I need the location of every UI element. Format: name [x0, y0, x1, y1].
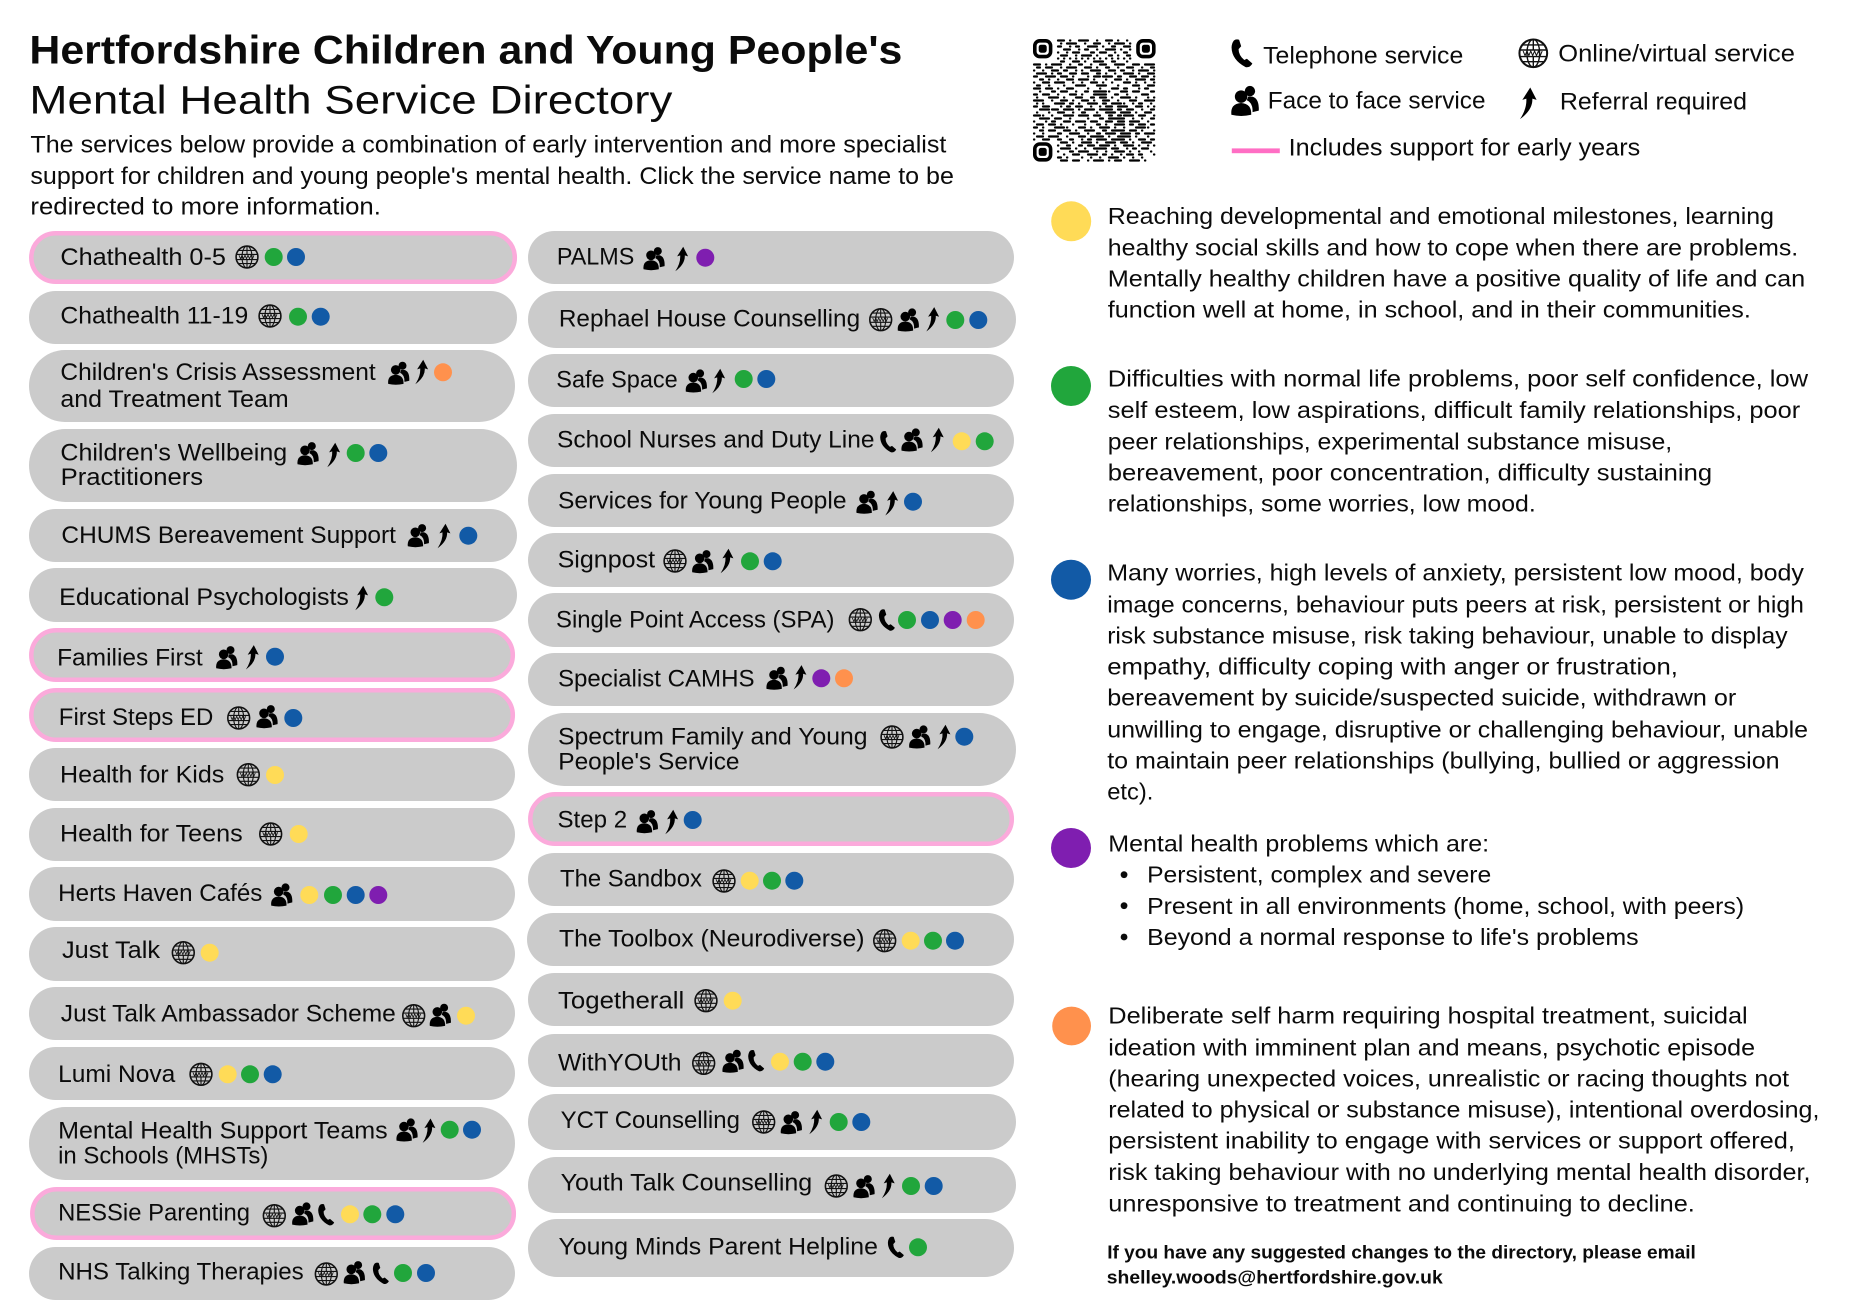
pill: The Toolbox (Neurodiverse) [527, 913, 1014, 966]
key: orange level: Deliberate self harm requiring hospital treatment, suicidal [1108, 1003, 1748, 1029]
key: yellow level [1051, 201, 1805, 322]
icons [888, 1237, 927, 1258]
intro text: redirected to more information. [30, 193, 381, 220]
icons [190, 1063, 282, 1085]
pill: Services for Young People [528, 474, 1014, 527]
key: purple level [1051, 828, 1744, 950]
icons [880, 428, 994, 452]
key: blue level: empathy, difficulty coping with anger or frustration, [1107, 653, 1678, 679]
pill: WithYOUth [528, 1034, 1014, 1087]
pill: YCT Counselling [528, 1094, 1016, 1150]
service name: The Toolbox (Neurodiverse) [559, 926, 864, 953]
key: blue level: Many worries, high levels of anxiety, persistent low mood, body [1107, 560, 1804, 586]
service name: YCT Counselling [561, 1107, 740, 1134]
key: yellow level: Mentally healthy children have a positive quality of life and can [1108, 266, 1805, 292]
service name: People's Service [558, 748, 740, 775]
pill: Signpost [528, 533, 1014, 587]
service name: PALMS [557, 244, 634, 271]
key: green level: Difficulties with normal life problems, poor self confidence, low [1108, 366, 1808, 392]
icons [403, 1004, 475, 1027]
key: orange level: related to physical or substance misuse), intentional overdosing, [1108, 1096, 1819, 1122]
intro text: support for children and young people's mental health. Click the service name to be [30, 163, 954, 190]
key: blue level: image concerns, behaviour puts peers at risk, persistent or high [1107, 591, 1804, 617]
key: green level: self esteem, low aspirations, difficult family relationships, poor [1108, 397, 1800, 423]
key: orange level: risk taking behaviour with no underlying mental health disorder, [1108, 1159, 1810, 1185]
service name: WithYOUth [558, 1049, 682, 1076]
icons [753, 1110, 870, 1134]
service name: Lumi Nova [58, 1061, 176, 1088]
icons [695, 990, 742, 1012]
service name: CHUMS Bereavement Support [61, 522, 396, 549]
service name: Just Talk Ambassador Scheme [61, 1001, 396, 1028]
service name: Services for Young People [558, 488, 846, 515]
icons [263, 1202, 404, 1227]
key: orange level: persistent inability to engage with services or support offered, [1108, 1128, 1795, 1154]
service name: Chathealth 0-5 [60, 244, 226, 271]
key: orange level [1052, 1003, 1819, 1216]
service name: Mental Health Support Teams [58, 1118, 388, 1145]
service name: Herts Haven Cafés [58, 880, 262, 907]
contact note: If you have any suggested changes to the directory, please email [1107, 1241, 1696, 1262]
service name: Rephael House Counselling [559, 306, 860, 333]
icons [874, 930, 964, 952]
pill: CHUMS Bereavement Support [29, 509, 517, 562]
icons [664, 549, 782, 573]
icons [228, 705, 302, 729]
pill: Safe Space [528, 354, 1014, 407]
pill: Step 2 [530, 794, 1012, 844]
service name: Signpost [558, 547, 655, 574]
icons [216, 645, 284, 670]
service name: Children's Wellbeing [60, 439, 287, 466]
legend: face to face service: Face to face service [1268, 88, 1486, 115]
key: purple level: Beyond a normal response to life's problems [1147, 924, 1639, 950]
service name [60, 359, 376, 413]
service name: Chathealth 11-19 [60, 303, 248, 330]
icons [637, 810, 702, 834]
icons [849, 609, 985, 631]
key: green level: relationships, some worries, low mood. [1108, 491, 1536, 517]
service name: Safe Space [556, 367, 678, 394]
pill: Mental Health Support Teams in Schools [29, 1107, 515, 1180]
service name: Youth Talk Counselling [561, 1170, 812, 1197]
icons [315, 1261, 435, 1285]
pill: Just Talk Ambassador Scheme [29, 987, 515, 1040]
pill: Young Minds Parent Helpline [528, 1219, 1014, 1277]
title: Mental Health Service Directory [29, 78, 672, 122]
pill: Single Point Access (SPA) [528, 593, 1014, 647]
service name: Educational Psychologists [59, 584, 349, 611]
key: blue level [1051, 560, 1808, 804]
icons [396, 1118, 481, 1143]
pill: Chathealth 11-19 [29, 291, 517, 344]
service name: Health for Kids [60, 762, 224, 789]
key: blue level: risk substance misuse, risk taking behaviour, unable to display [1107, 622, 1788, 648]
icon: QR code [1034, 40, 1154, 160]
icons [355, 586, 393, 610]
key: green level [1051, 366, 1808, 517]
pill: Herts Haven Cafés [29, 867, 515, 921]
key: orange level: unresponsive to treatment and continuing to decline. [1108, 1190, 1695, 1216]
service name: Health for Teens [60, 821, 243, 848]
pill: Specialist CAMHS [528, 653, 1014, 706]
icons [643, 247, 714, 271]
pill: Children's Crisis Assessment and Treatment Team [29, 350, 515, 422]
title [29, 28, 902, 122]
key: green level: peer relationships, experimental substance misuse, [1108, 428, 1672, 454]
pill: Togetherall [528, 973, 1014, 1026]
service name: Just Talk [62, 937, 161, 964]
icons [825, 1174, 943, 1198]
legend: referral required: Referral required [1560, 88, 1747, 115]
service name [60, 439, 287, 491]
icons [388, 360, 452, 385]
service name: Children's Crisis Assessment [60, 359, 376, 386]
legend: early years line: Includes support for early years [1289, 135, 1640, 162]
pill: Lumi Nova [29, 1047, 515, 1100]
service name: School Nurses and Duty Line [557, 427, 874, 454]
service name: in Schools (MHSTs) [58, 1142, 268, 1169]
pill: Youth Talk Counselling [528, 1157, 1016, 1213]
intro text: The services below provide a combination of early intervention and more specialist [30, 132, 947, 159]
icons [172, 942, 219, 964]
service name: NHS Talking Therapies [58, 1258, 304, 1285]
pill: PALMS [528, 231, 1014, 284]
service name: Specialist CAMHS [558, 666, 754, 693]
icons [236, 246, 305, 268]
service name: and Treatment Team [60, 386, 289, 413]
legend: referral required [1520, 87, 1747, 119]
key: blue level: to maintain peer relationships (bullying, bullied or aggression [1107, 747, 1780, 773]
service name: NESSie Parenting [58, 1200, 250, 1227]
panel: services column A-N [29, 233, 517, 1300]
icons [271, 883, 387, 906]
key: blue level: etc). [1107, 778, 1153, 804]
service name: Families First [57, 645, 203, 672]
title: Hertfordshire Children and Young People's [29, 28, 902, 72]
pill: Educational Psychologists [29, 568, 517, 622]
service name: Single Point Access (SPA) [556, 607, 834, 634]
icons [870, 307, 987, 332]
icons [856, 491, 922, 516]
service name: The Sandbox [560, 866, 702, 893]
service name: Spectrum Family and Young [558, 724, 868, 751]
pill: Families First [31, 630, 513, 680]
pill: Rephael House Counselling [528, 291, 1016, 348]
pill: First Steps ED [31, 690, 513, 740]
key: orange level: (hearing unexpected voices, unrealistic or racing thoughts not [1108, 1066, 1790, 1092]
key: blue level: bereavement by suicide/suspected suicide, withdrawn or [1107, 685, 1736, 711]
key: blue level: unwilling to engage, disruptive or challenging behaviour, unable [1107, 716, 1808, 742]
contact note: shelley.woods@hertfordshire.gov.uk [1107, 1266, 1443, 1287]
service name [58, 1118, 388, 1169]
icons [766, 665, 853, 690]
pill: School Nurses and Duty Line [528, 414, 1014, 467]
pill: Health for Teens [29, 808, 515, 861]
pill: Spectrum Family and Young People's Service [528, 713, 1016, 786]
legend: online/virtual service: Online/virtual service [1558, 41, 1795, 68]
pill: The Sandbox [528, 853, 1014, 906]
key: yellow level: healthy social skills and how to cope when there are problems. [1108, 235, 1798, 261]
key: yellow level: function well at home, in school, and in their communities. [1108, 296, 1751, 322]
contact note [1107, 1241, 1696, 1287]
legend: telephone service: Telephone service [1263, 42, 1463, 69]
key: purple level: Present in all environments (home, school, with peers) [1147, 893, 1744, 919]
icons [408, 524, 477, 548]
icons [237, 764, 284, 786]
service name [558, 724, 868, 775]
intro text [30, 132, 954, 220]
service name: First Steps ED [59, 704, 213, 731]
panel: services column P-Y [527, 231, 1016, 1277]
service name: Togetherall [558, 988, 684, 1015]
legend [1231, 39, 1795, 162]
icons [693, 1050, 834, 1074]
icons [260, 823, 308, 845]
key: green level: bereavement, poor concentration, difficulty sustaining [1108, 460, 1712, 486]
icons [686, 369, 775, 393]
icons [259, 305, 330, 327]
pill: Health for Kids [29, 748, 515, 801]
icons [713, 870, 803, 892]
key: yellow level: Reaching developmental and emotional milestones, learning [1108, 203, 1774, 229]
icons [297, 442, 387, 467]
key: orange level: ideation with imminent plan and means, psychotic episode [1108, 1034, 1755, 1060]
key: purple level: Mental health problems which are: [1108, 831, 1489, 857]
pill: Children's Wellbeing Practitioners [29, 429, 517, 502]
service name: Step 2 [558, 807, 627, 834]
icons [881, 725, 973, 749]
pill: NHS Talking Therapies [29, 1247, 515, 1300]
pill: NESSie Parenting [32, 1189, 514, 1238]
pill: Chathealth 0-5 [31, 233, 515, 282]
key: purple level: Persistent, complex and severe [1147, 862, 1491, 888]
service name: Practitioners [61, 464, 203, 491]
service name: Young Minds Parent Helpline [558, 1234, 878, 1261]
pill: Just Talk [29, 927, 515, 981]
